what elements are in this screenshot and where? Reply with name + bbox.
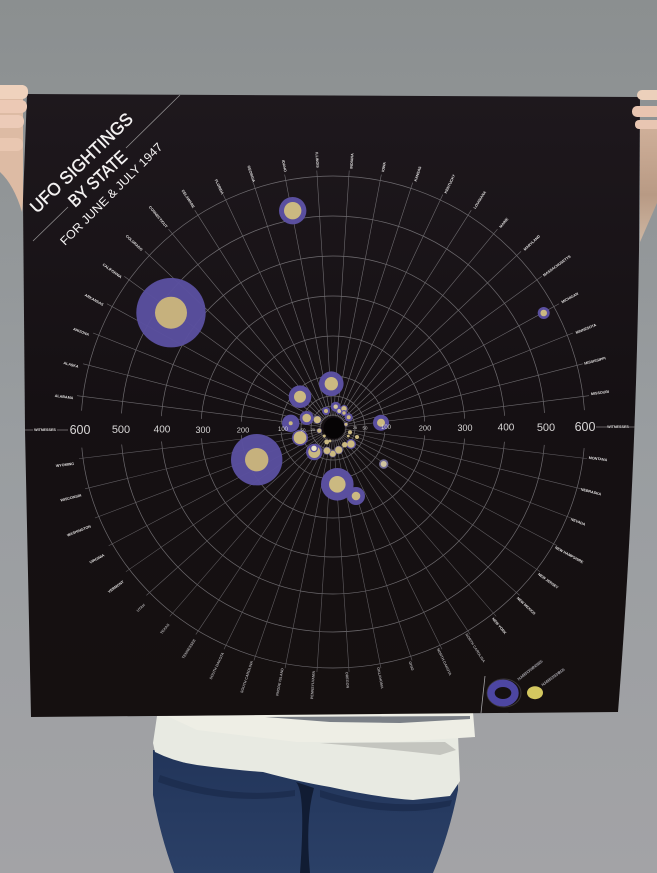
axis scale: right <box>353 420 595 434</box>
state labels: lower half: NEW JERSEY <box>537 572 559 590</box>
legend: sightings dot: NUMBER OF SIGHTINGS <box>540 667 566 687</box>
bubble: Colorado <box>289 385 311 408</box>
legend divider <box>481 676 485 713</box>
state labels: upper half: INDIANA <box>350 153 354 169</box>
state labels: lower half: NEW HAMPSHIRE <box>554 546 584 565</box>
small bubbles around the center <box>300 402 359 460</box>
axis scale: left: 600 <box>70 423 90 437</box>
state labels: upper half: CALIFORNIA <box>102 263 123 279</box>
state labels: upper half: COLORADO <box>125 234 143 252</box>
state labels: lower half: NEBRASKA <box>580 487 602 497</box>
state labels: upper half: LOUISIANA <box>473 190 487 210</box>
state labels: lower half: NEW YORK <box>491 617 507 635</box>
axis scale: right: 100 <box>381 425 392 431</box>
state labels: lower half: PENNSYLVANIA <box>310 670 316 699</box>
state labels: lower half: TEXAS <box>160 623 171 635</box>
axis label: witnesses left: WITNESSES <box>34 428 56 432</box>
left hand <box>0 85 28 212</box>
axis scale: right: 500 <box>537 422 555 434</box>
state labels: lower half: OREGON <box>344 672 350 689</box>
bubble: Wisconsin <box>292 430 308 446</box>
state labels: lower half: SOUTH DAKOTA <box>209 652 225 680</box>
state labels: upper half: MARYLAND <box>523 234 541 252</box>
state labels: lower half <box>56 456 608 699</box>
axis scale: right: 50 <box>362 426 368 430</box>
state labels: upper half: ALASKA <box>63 361 79 369</box>
state labels: upper half: FLORIDA <box>214 179 224 196</box>
state labels: lower half: RHODE ISLAND <box>275 668 285 696</box>
state labels: upper half: ARKANSAS <box>84 293 105 307</box>
state labels: upper half: MAINE <box>499 217 510 229</box>
bubble: Washington <box>231 434 282 485</box>
state labels: upper half: ARIZONA <box>72 327 90 337</box>
axis scale: right: 600 <box>575 420 595 434</box>
state labels: lower half: OKLAHOMA <box>376 667 384 689</box>
axis scale: left: 400 <box>154 424 171 436</box>
state labels: upper half <box>55 152 609 400</box>
state labels: upper half: DELAWARE <box>181 189 196 209</box>
bubble: Ohio <box>347 487 365 505</box>
bubble: California <box>136 278 206 347</box>
state labels: upper half: CONNECTICUT <box>148 205 169 229</box>
axis label: witnesses right: WITNESSES <box>607 425 629 429</box>
bubble: Pennsylvania <box>321 468 354 501</box>
state labels: upper half: IOWA <box>381 161 387 172</box>
axis scale: right: 25 <box>353 426 357 430</box>
bubble: Missouri <box>373 415 389 431</box>
state labels: upper half: GEORGIA <box>246 165 256 183</box>
legend: witnesses ring <box>487 658 544 707</box>
state labels: upper half: MISSISSIPPI <box>584 356 606 366</box>
state labels: lower half: WYOMING <box>56 462 75 468</box>
axis scale: left: 200 <box>237 426 249 434</box>
state labels: lower half: MONTANA <box>589 456 608 462</box>
title: UFO sightings: UFO SIGHTINGS <box>26 109 137 217</box>
axis scale: left <box>70 423 315 437</box>
state labels: upper half: MISSOURI <box>591 390 609 396</box>
person: jeans <box>153 750 458 873</box>
legend: witnesses ring: NUMBER OF WITNESSES <box>516 658 544 682</box>
state labels: upper half: MICHIGAN <box>561 292 579 304</box>
subtitle: FOR JUNE & JULY 1947 <box>57 140 166 248</box>
state labels: upper half: KANSAS <box>414 165 422 182</box>
title block <box>26 109 166 248</box>
state labels: lower half: OHIO <box>408 661 414 671</box>
radial grid rings <box>81 176 585 680</box>
spokes: lower half <box>79 429 587 672</box>
state labels: lower half: UTAH <box>136 603 146 613</box>
state labels: lower half: WISCONSIN <box>60 493 82 503</box>
axis scale: right: 400 <box>498 422 515 434</box>
axis label: witnesses right <box>596 425 635 429</box>
state labels: lower half: NORTH DAKOTA <box>436 648 452 677</box>
center hole <box>324 418 344 438</box>
axis scale: right: 300 <box>457 423 473 433</box>
state labels: lower half: NEVADA <box>570 517 586 527</box>
state labels: upper half: IDAHO <box>281 160 287 172</box>
axis scale: left: 25 <box>311 428 315 432</box>
legend: sightings dot <box>527 667 566 699</box>
bubble: Illinois <box>319 371 344 396</box>
state labels: upper half: MASSACHUSETTS <box>542 254 572 277</box>
state labels: upper half: KENTUCKY <box>444 173 456 194</box>
axis label: witnesses left <box>25 428 68 432</box>
bubble: New Jersey <box>379 459 388 469</box>
state labels: lower half: NEW MEXICO <box>516 596 536 616</box>
bubble: Idaho <box>279 197 306 224</box>
spokes: upper half <box>77 171 589 426</box>
title: by state: BY STATE <box>64 147 131 211</box>
state labels: lower half: TENNESSEE <box>181 638 197 660</box>
axis scale: left: 100 <box>278 427 289 433</box>
state labels: lower half: SOUTH CAROLINA <box>240 660 254 694</box>
state labels: upper half: MINNESOTA <box>575 323 597 335</box>
axis scale: left: 500 <box>112 424 130 436</box>
bubble: Michigan <box>538 307 550 319</box>
state labels: lower half: VERMONT <box>107 580 125 594</box>
state labels: upper half: ILLINOIS <box>315 152 320 168</box>
axis scale: left: 50 <box>300 428 306 432</box>
poster <box>23 94 640 717</box>
state labels: upper half: ALABAMA <box>55 394 74 400</box>
axis scale: left: 300 <box>195 425 211 435</box>
state labels: lower half: NORTH CAROLINA <box>464 633 486 664</box>
person: white shirt <box>153 712 475 800</box>
state labels: lower half: WASHINGTON <box>66 524 92 538</box>
right hand <box>632 90 657 242</box>
axis scale: right: 200 <box>419 424 431 432</box>
state labels: lower half: VIRGINIA <box>89 553 105 565</box>
title rules <box>33 95 180 241</box>
bubble: Alabama <box>282 415 299 432</box>
